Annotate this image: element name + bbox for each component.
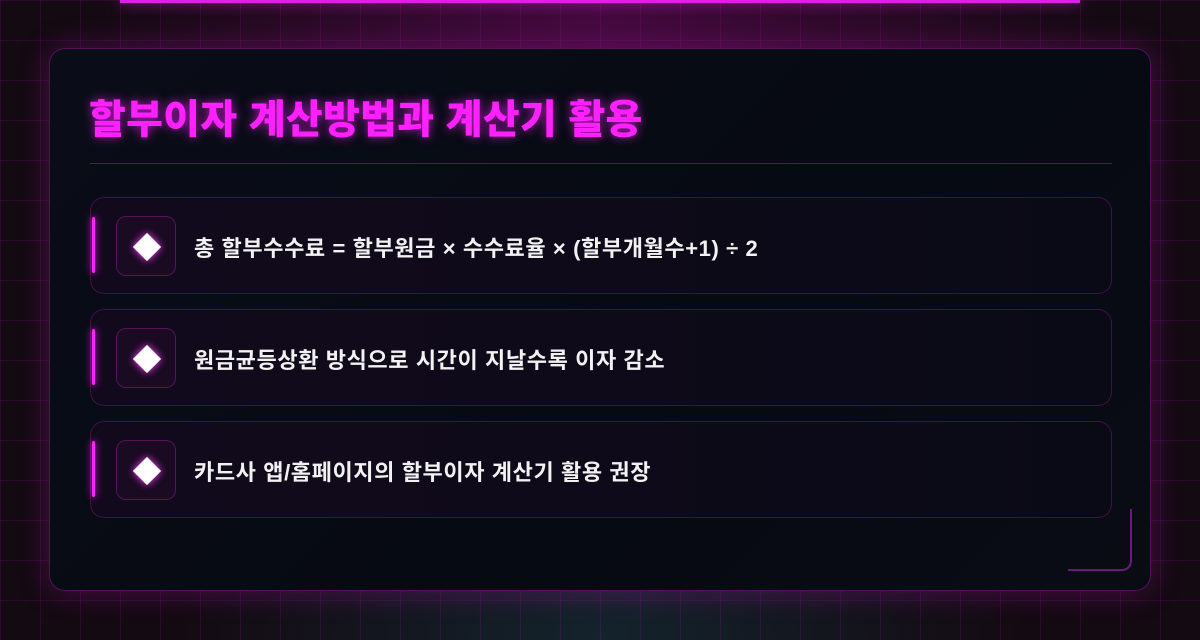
text 3: 카드사 앱/홈페이지의 할부이자 계산기 활용 권장 bbox=[194, 460, 651, 485]
item 2 bbox=[90, 309, 1112, 406]
icon: diamond bbox=[116, 216, 176, 276]
item 1 bbox=[90, 197, 1112, 294]
item 3 bbox=[90, 421, 1112, 518]
title: 할부이자 계산방법과 계산기 활용 bbox=[89, 98, 643, 142]
icon: diamond bbox=[116, 328, 176, 388]
icon: diamond bbox=[116, 440, 176, 500]
text 2: 원금균등상환 방식으로 시간이 지날수록 이자 감소 bbox=[194, 348, 665, 373]
panel: main card bbox=[49, 48, 1151, 591]
text 1: 총 할부수수료 = 할부원금 × 수수료율 × (할부개월수+1) ÷ 2 bbox=[194, 236, 758, 261]
